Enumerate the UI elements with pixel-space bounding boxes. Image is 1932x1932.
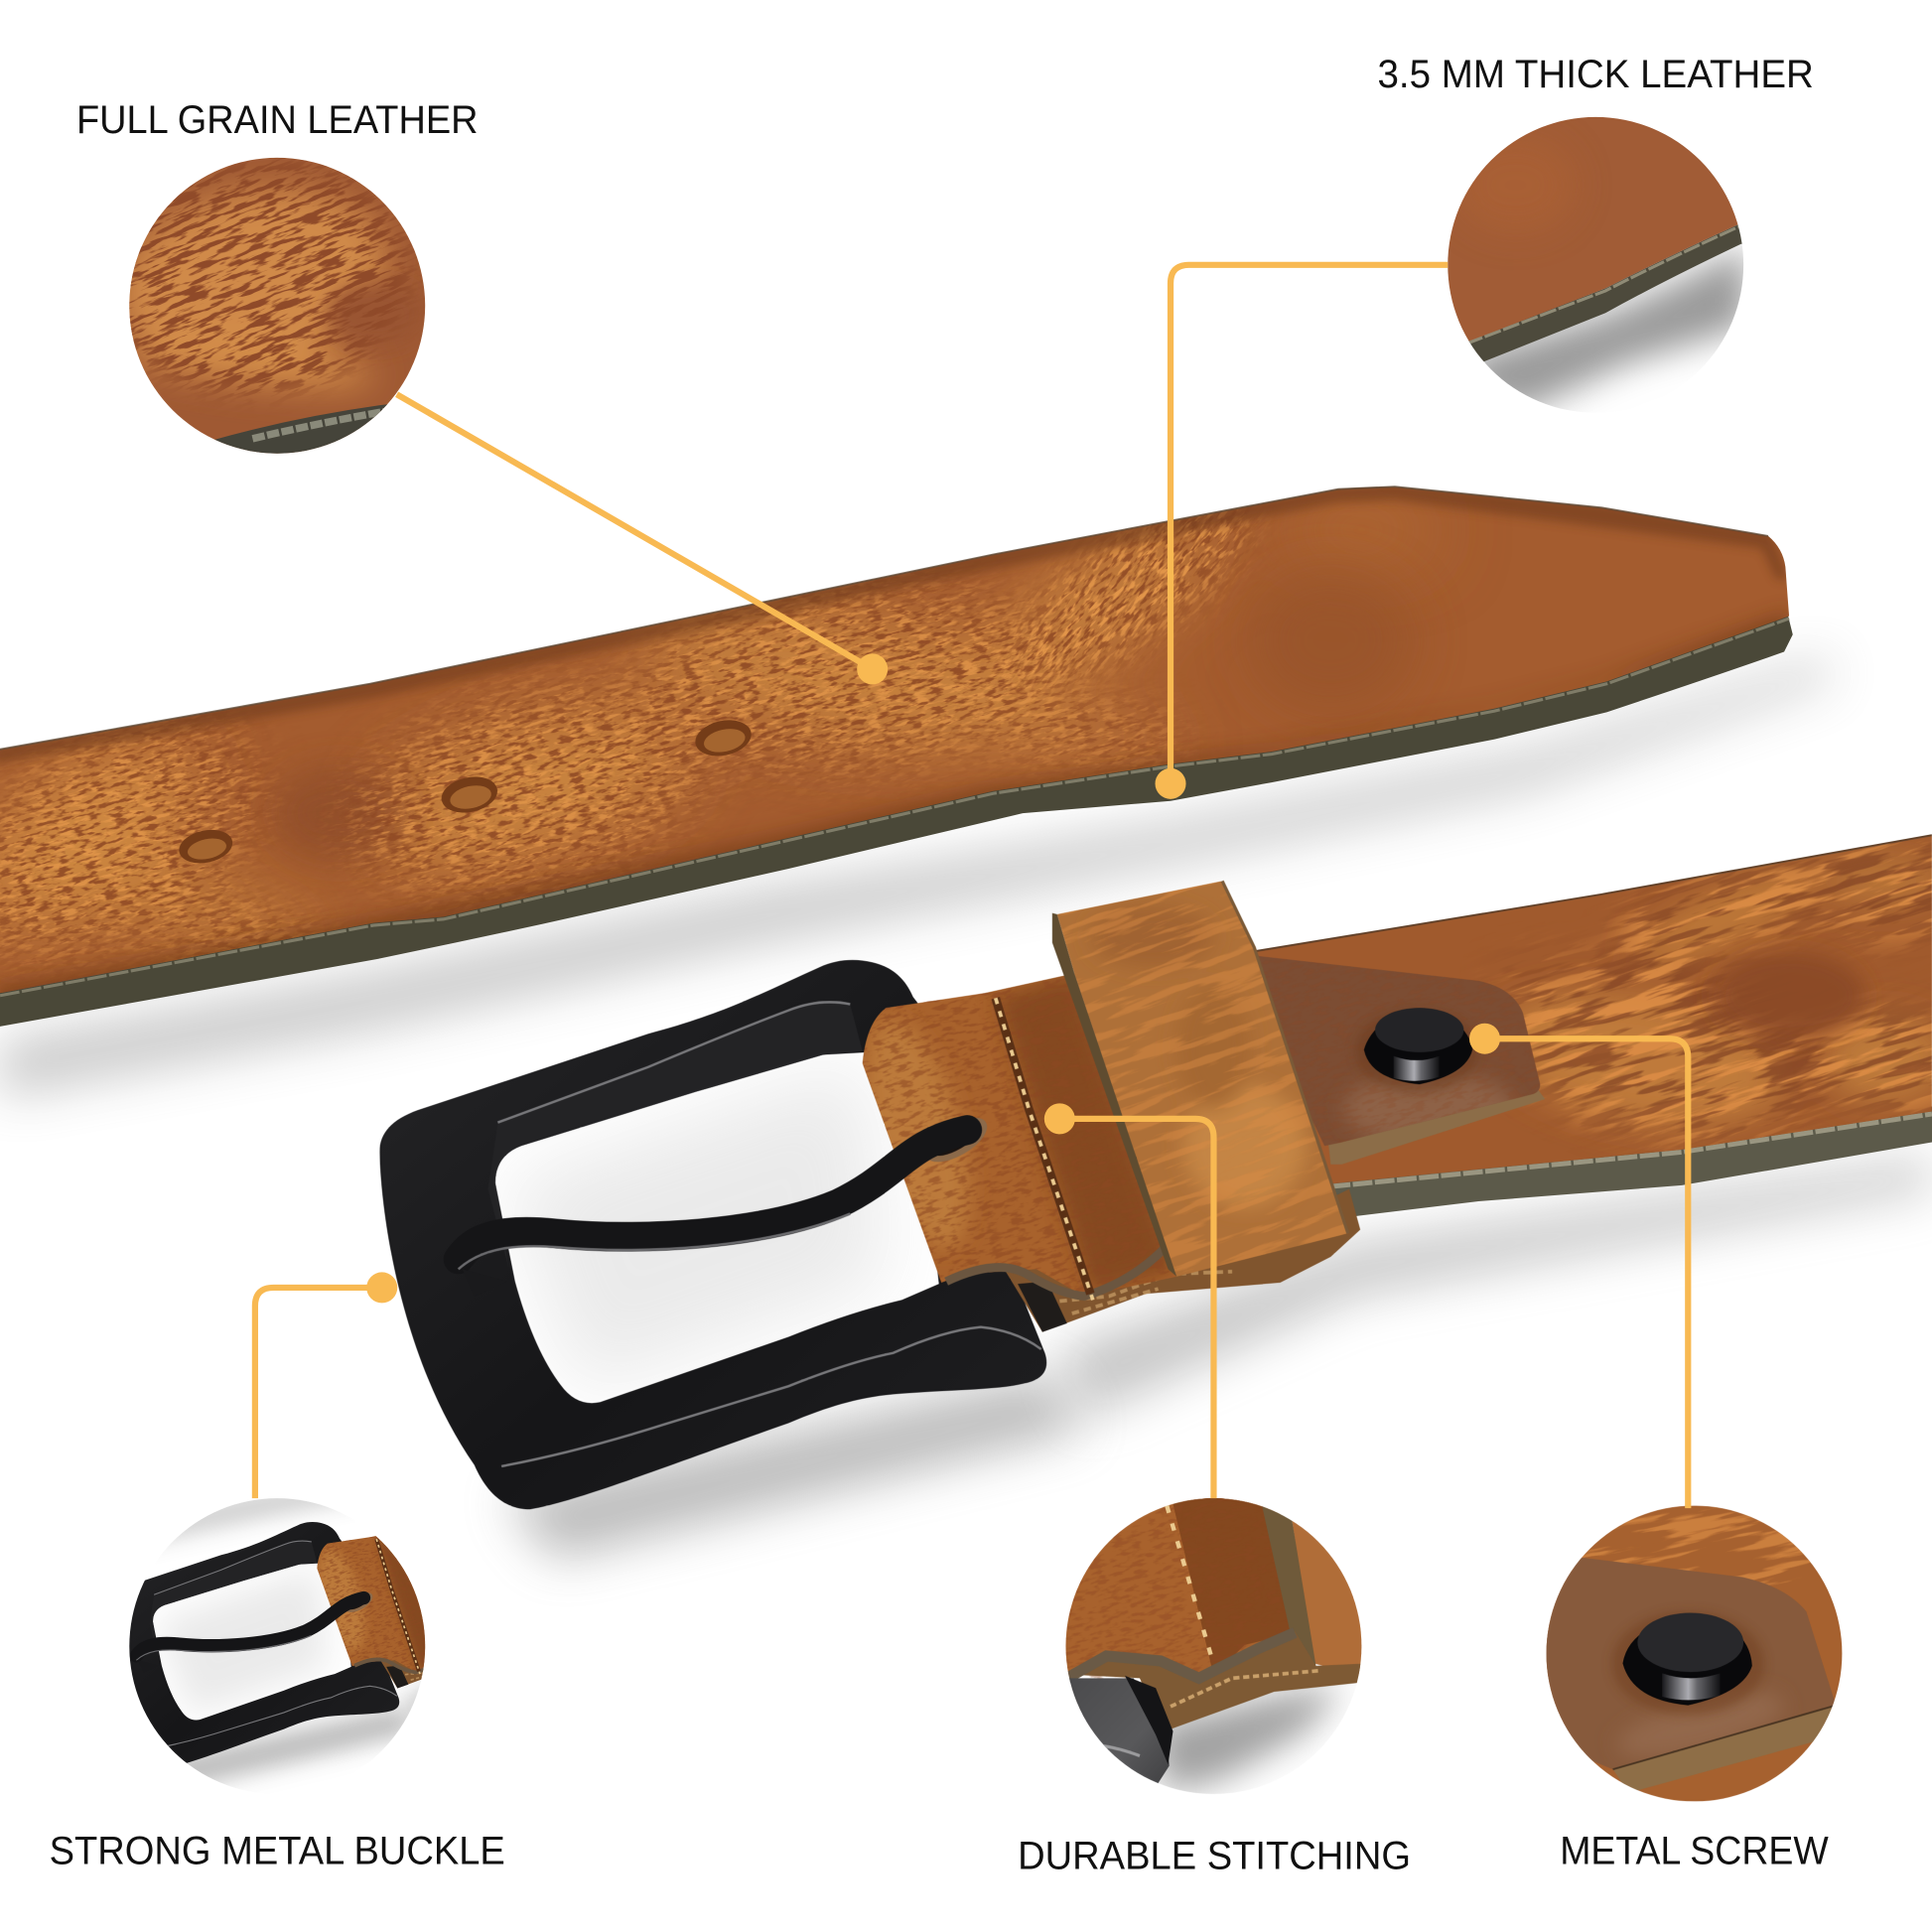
streaks above tab (1519, 1457, 1867, 1635)
lower belt face (1257, 834, 1932, 1183)
detail circle: metal screw (1519, 1457, 1867, 1811)
edge band (1442, 219, 1749, 372)
keeper side strip (1259, 1493, 1315, 1666)
coarse grain texture (129, 157, 417, 397)
label: strong metal buckle: STRONG METAL BUCKLE (50, 1830, 505, 1873)
detail circle: thick leather edge (1442, 111, 1749, 419)
stitching (996, 998, 1090, 1294)
belt hole 1 (176, 825, 235, 868)
screw base (1622, 1629, 1752, 1706)
screw (1355, 1008, 1478, 1093)
screw head (1637, 1613, 1743, 1672)
belt hole 3 (692, 715, 755, 760)
lower belt strap (1257, 834, 1932, 1216)
keeper face (1056, 881, 1346, 1277)
lower belt edge (1328, 1106, 1932, 1216)
callout: thickness line (1156, 265, 1448, 799)
frayed lip (1067, 1632, 1295, 1678)
label: durable stitching: DURABLE STITCHING (1018, 1835, 1411, 1878)
masked grain texture (0, 581, 1177, 966)
dark groove beside stitch (1171, 1493, 1297, 1676)
buckle frame (379, 960, 1046, 1509)
screw highlight (1662, 1673, 1721, 1700)
detail circle: buckle (0, 1137, 931, 1794)
keeper loop (1052, 880, 1348, 1277)
belt hole 2 (438, 772, 500, 817)
strap grain (1013, 1428, 1380, 1732)
buckle prong (459, 1130, 967, 1297)
left strap face (1059, 1491, 1312, 1678)
upper belt strap (0, 485, 1793, 1027)
callout: full grain line (397, 394, 888, 684)
leather cut edge (214, 404, 387, 454)
callout: screw line (1469, 1024, 1688, 1508)
leather face (1442, 111, 1749, 352)
keeper face (1288, 1491, 1368, 1676)
strap underside (1004, 1189, 1360, 1332)
frayed tab edge (1613, 1706, 1839, 1793)
shadow under edge (1466, 246, 1747, 413)
keeper side edge (1052, 913, 1176, 1277)
tab face (1259, 956, 1541, 1146)
stitching (1167, 1506, 1223, 1698)
frayed fibres (1171, 1671, 1318, 1707)
dark strap end (1018, 1282, 1067, 1332)
detail circle: full grain leather (129, 157, 425, 454)
shadow under leather (1152, 1686, 1343, 1793)
label: full grain leather: FULL GRAIN LEATHER (76, 98, 479, 142)
prong slot (918, 1109, 994, 1171)
tab lower edge (1328, 1089, 1545, 1165)
steep grain near tip (993, 509, 1252, 695)
belt photo scene (0, 97, 1932, 1559)
streak texture (1508, 842, 1932, 1150)
buckle end (1059, 1678, 1170, 1796)
frayed stitching underside (1059, 1272, 1232, 1313)
callout: stitching line (1044, 1103, 1213, 1498)
callout: buckle line (255, 1272, 397, 1498)
cast shadows (0, 659, 1932, 1559)
belt leather face (0, 486, 1789, 993)
top dark line (0, 486, 1768, 751)
frame highlights (497, 1002, 1041, 1466)
belt loop strap leather (742, 883, 1360, 1377)
detail circle: stitching (1013, 1428, 1380, 1799)
buckle highlight (1069, 1744, 1140, 1756)
inner bevel (487, 1002, 863, 1269)
edge highlight (1466, 221, 1749, 344)
pointed tab (1259, 956, 1545, 1165)
belt cut edge (0, 610, 1793, 1027)
strap face (742, 883, 1253, 1377)
label: thick leather: 3.5 MM THICK LEATHER (1378, 53, 1814, 96)
edge highlight (0, 619, 1789, 996)
dark wedge (1125, 1676, 1173, 1764)
screw surround (1611, 1611, 1764, 1716)
tab face (1540, 1558, 1836, 1769)
label: metal screw: METAL SCREW (1560, 1830, 1829, 1873)
strap frayed bottom (946, 1244, 1169, 1297)
lower leather (1069, 1631, 1368, 1728)
